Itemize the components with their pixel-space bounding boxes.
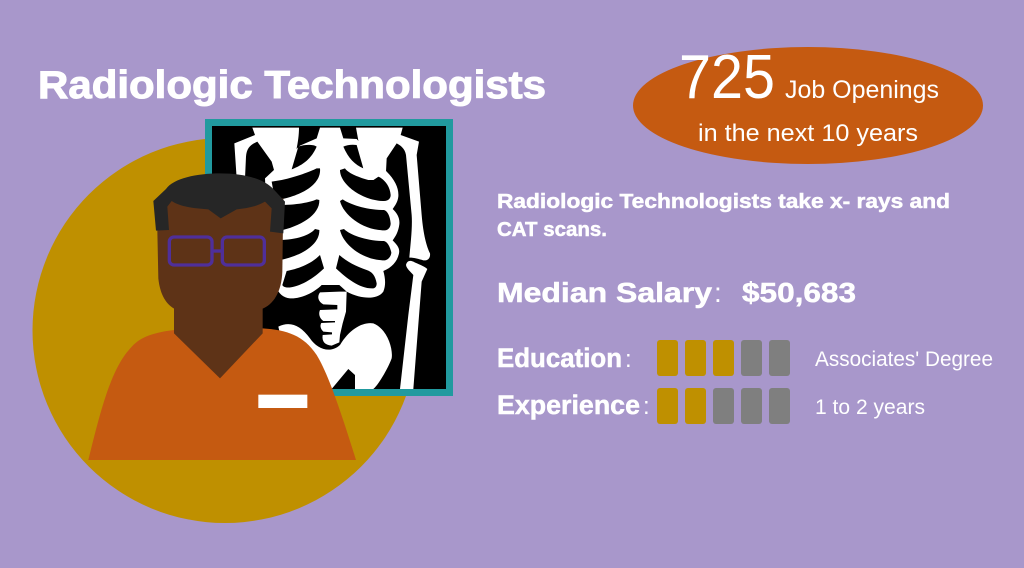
left shoulder and humerus xyxy=(234,128,299,178)
median salary: $50,683 xyxy=(742,277,856,308)
description: Radiologic Technologists take x- rays and xyxy=(497,191,950,213)
job openings label: Job Openings xyxy=(785,76,939,104)
orange scrub top xyxy=(88,328,356,460)
education label: Education xyxy=(497,343,622,373)
callout background ellipse xyxy=(633,47,983,164)
experience rating bars xyxy=(657,388,790,424)
experience row xyxy=(497,388,925,424)
lumbar vertebrae xyxy=(318,292,347,346)
job openings number: 725 xyxy=(679,43,775,112)
x-ray panel xyxy=(208,122,450,392)
skeleton xyxy=(234,128,430,389)
time frame: in the next 10 years xyxy=(698,120,918,147)
hair xyxy=(153,173,285,233)
name badge xyxy=(258,395,307,408)
ribcage xyxy=(265,128,399,298)
callout: job openings xyxy=(633,43,983,164)
right forearm xyxy=(400,261,427,389)
gold background circle xyxy=(32,138,418,523)
education value: Associates' Degree xyxy=(815,348,993,371)
glasses xyxy=(169,237,264,265)
description xyxy=(497,191,950,241)
x-ray frame xyxy=(208,122,450,392)
technologist figure xyxy=(88,173,356,460)
neck xyxy=(174,298,263,378)
head xyxy=(157,198,283,309)
experience label: Experience xyxy=(497,390,640,420)
right shoulder and humerus xyxy=(356,128,430,260)
education row xyxy=(497,340,993,376)
pelvis xyxy=(278,323,392,389)
experience colon: : xyxy=(643,393,650,420)
experience value: 1 to 2 years xyxy=(815,396,925,419)
title: Radiologic Technologists xyxy=(38,64,546,107)
median salary: : xyxy=(714,277,722,308)
education rating bars xyxy=(657,340,790,376)
median salary xyxy=(497,277,856,308)
illustration: technologist with x-ray xyxy=(32,122,450,523)
rib gaps xyxy=(272,145,391,292)
description: CAT scans. xyxy=(497,219,607,241)
education colon: : xyxy=(625,346,632,373)
median salary: Median Salary xyxy=(497,277,712,308)
